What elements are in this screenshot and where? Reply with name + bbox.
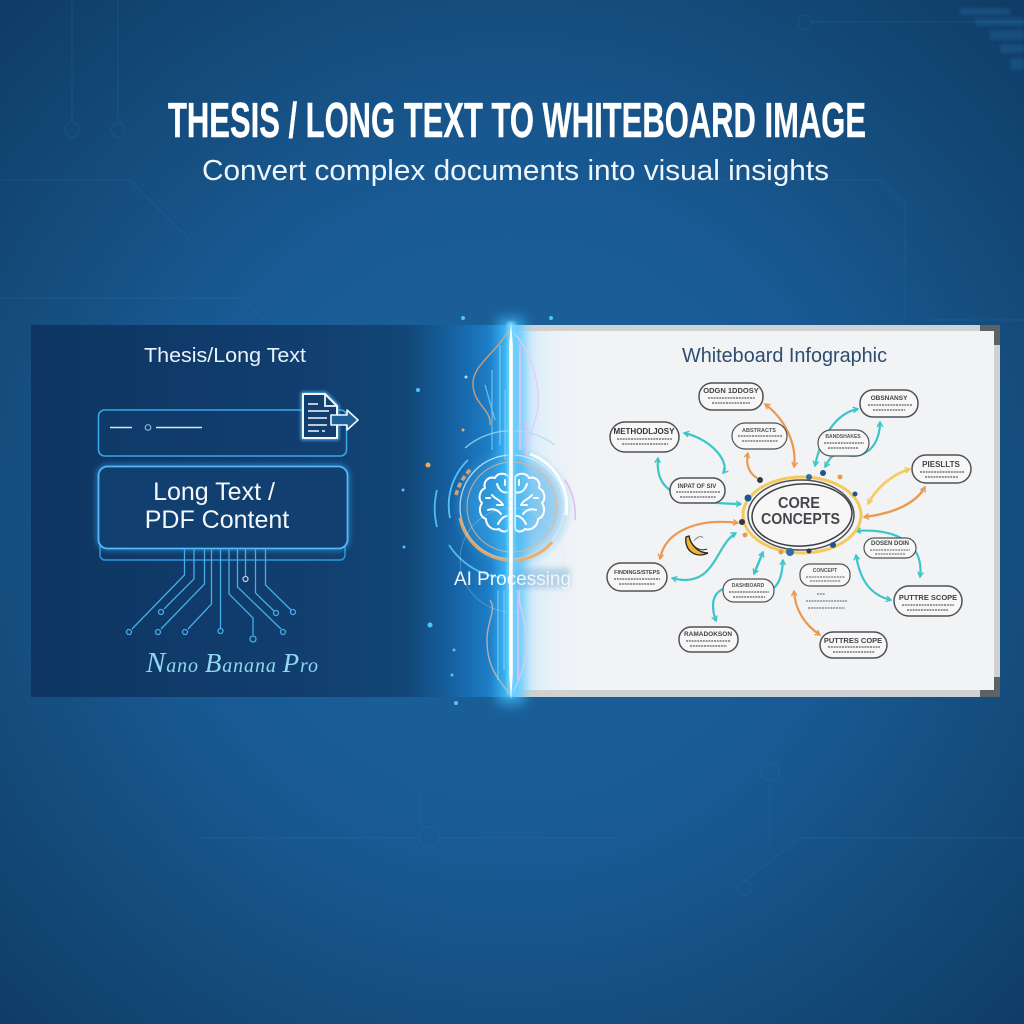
beam core line	[507, 322, 515, 700]
node: input: INPAT OF SIV	[678, 484, 716, 490]
node: methodology	[610, 422, 679, 452]
node: small upper right	[818, 430, 869, 456]
node: lower centre left: DASHBOARD	[732, 583, 765, 589]
icon: brain	[480, 474, 544, 531]
node: small upper right: BANDSHAKES	[825, 434, 861, 440]
panel: whiteboard	[510, 325, 1000, 697]
core label: CONCEPTS	[761, 511, 840, 528]
whiteboard heading: Whiteboard Infographic	[682, 345, 887, 367]
upper input box	[98, 410, 346, 456]
main content box	[98, 466, 348, 548]
node: ramadokson: RAMADOKSON	[684, 631, 732, 638]
beam glow	[498, 318, 524, 704]
back box layer	[100, 500, 345, 560]
mind map arrows	[658, 404, 925, 635]
label backing glow	[514, 568, 570, 588]
core glow	[450, 445, 574, 569]
node: small upper left: ABSTRACTS	[742, 428, 776, 434]
corner texture top right	[960, 8, 1024, 70]
node: observant: OBSNANSY	[871, 395, 908, 402]
node: small upper left	[732, 423, 787, 449]
box label: PDF Content	[145, 506, 289, 534]
processor rings	[435, 431, 575, 612]
node: lower centre left	[723, 579, 774, 602]
node: lower centre right: CONCEPT	[813, 568, 837, 574]
node: future scope: PUTTRE SCOPE	[899, 593, 957, 602]
core dots	[739, 470, 858, 556]
node: lower left: FINDINGS/STEPS	[614, 570, 660, 576]
node: results	[912, 455, 971, 483]
node: dosen: DOSEN DOIN	[871, 541, 909, 547]
node: top topic	[699, 383, 763, 410]
node: dosen	[864, 538, 916, 558]
node: core concepts	[739, 470, 861, 556]
node: puttres cope: PUTTRES COPE	[824, 636, 882, 645]
node: lower centre right	[800, 564, 850, 586]
box label: Long Text /	[153, 478, 275, 506]
core label	[761, 495, 840, 528]
circuit traces	[126, 548, 296, 642]
node: methodology: METHODLJOSY	[614, 427, 675, 436]
icon: document with arrow	[303, 394, 358, 438]
box glow	[98, 466, 348, 548]
sparks	[402, 316, 553, 705]
node: observant	[860, 390, 918, 417]
subtitle: Convert complex documents into visual insights	[202, 155, 829, 187]
node: puttres cope	[820, 632, 887, 658]
label: ai processing: AI Processing	[454, 569, 571, 590]
icon: banana	[686, 536, 708, 555]
core label: CORE	[778, 495, 820, 512]
node: lower left	[607, 563, 667, 591]
node: ramadokson	[679, 627, 738, 652]
node: future scope	[894, 586, 962, 616]
panel heading: thesis: Thesis/Long Text	[144, 345, 306, 367]
energy beam and ai processing core	[402, 316, 575, 705]
box label	[145, 478, 289, 534]
signature: nano banana pro: Nano Banana Pro	[145, 647, 318, 679]
handwritten note	[806, 594, 847, 608]
node: input	[670, 478, 725, 503]
node: results: PIESLLTS	[922, 460, 960, 469]
whiteboard corner caps	[980, 325, 1000, 697]
node: top topic: ODGN 1DDOSY	[703, 386, 759, 395]
flowing data lines	[473, 328, 538, 696]
panel: thesis input	[31, 325, 511, 697]
